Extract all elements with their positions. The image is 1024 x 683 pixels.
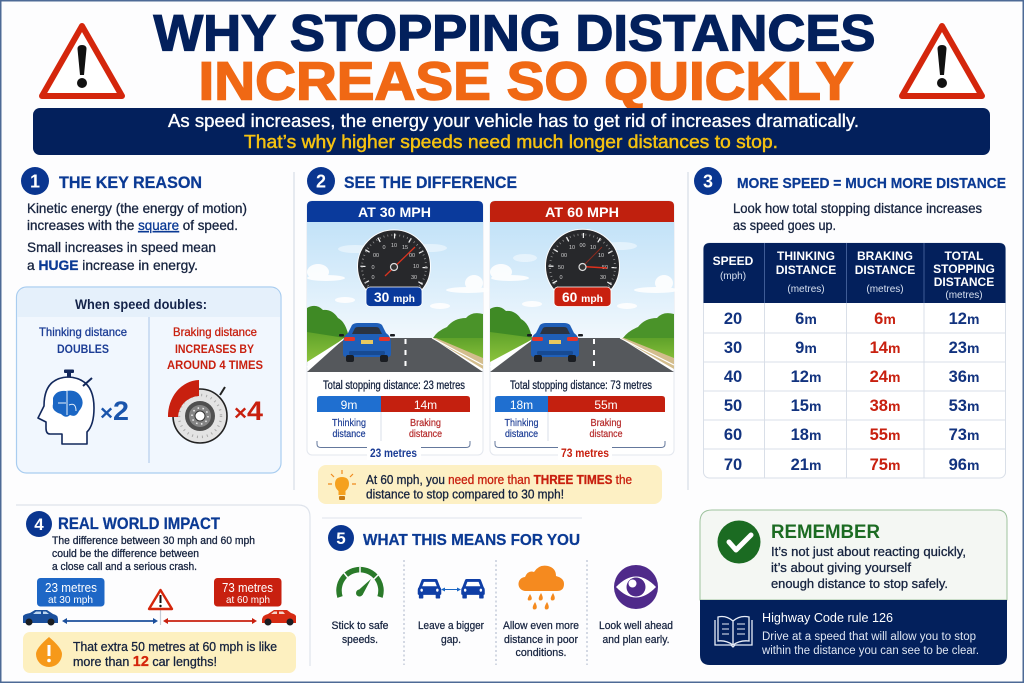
row 70 mph: 96m <box>949 456 979 474</box>
icon: warning triangle left <box>42 26 122 96</box>
distance bar 60 mph: 18m <box>510 398 533 412</box>
table header: SPEED <box>713 254 754 268</box>
icon: alert drop <box>36 637 62 667</box>
text: braking distance increases: AROUND 4 TIMES <box>167 358 263 372</box>
tip: look well ahead: and plan early. <box>602 634 670 646</box>
panel: highway code: Drive at a speed that will allow you to stop <box>762 631 976 643</box>
distance bar 60 mph: 73 metres <box>561 448 609 460</box>
icon: two cars with gap <box>418 579 485 598</box>
row 20 mph <box>724 310 979 328</box>
heading: see the difference: SEE THE DIFFERENCE <box>344 174 517 192</box>
callout: three times the distance <box>318 465 662 504</box>
card: at 30 mph <box>307 201 490 460</box>
icon: light bulb <box>328 470 356 500</box>
speedometer 30 mph: 0 <box>382 245 386 251</box>
distance bar 60 mph: 55m <box>594 398 618 412</box>
speedometer 60 mph: 10 <box>590 245 596 251</box>
panel: the key reason <box>16 167 281 473</box>
panel: real world impact <box>16 505 310 673</box>
heading: real world impact <box>26 511 221 537</box>
callout: three times the distance: distance to stop compared to 30 mph! <box>366 488 564 502</box>
label: 23 metres at 30 mph <box>37 578 104 606</box>
speedometer 60 mph: 30 <box>600 275 606 281</box>
icon: eye <box>614 565 658 609</box>
tip: poor conditions: distance in poor <box>504 634 578 646</box>
heading: remember: REMEMBER <box>771 522 880 543</box>
speedometer 60 mph: 0 <box>559 275 563 281</box>
text: braking distance increases: INCREASES BY <box>175 342 254 356</box>
callout: car lengths: more than 12 car lengths! <box>73 653 217 670</box>
row 50 mph: 38m <box>870 397 900 415</box>
panel: highway code <box>700 600 1007 665</box>
panel: see the difference <box>307 167 678 504</box>
speedometer 30 mph: 00 <box>373 253 379 259</box>
heading: see the difference <box>307 167 517 195</box>
table header: DISTANCE <box>776 263 836 277</box>
icon: warning sign <box>149 590 172 625</box>
label: 73 metres at 60 mph: at 60 mph <box>226 594 270 606</box>
table header: (metres) <box>866 284 904 295</box>
row 70 mph: 21m <box>791 456 821 474</box>
row 40 mph: 24m <box>870 368 900 386</box>
text block: remember: enough distance to stop safely. <box>771 576 948 591</box>
row 70 mph <box>724 456 979 474</box>
subtitle banner: That’s why higher speeds need much longer distances to stop. <box>244 131 778 152</box>
label: 23 metres at 30 mph: 23 metres <box>45 580 97 595</box>
row 20 mph: 12m <box>949 310 979 328</box>
text: thinking distance doubles <box>39 325 127 356</box>
distance bar 60 mph: Thinking <box>504 418 538 429</box>
distance bar 30 mph: 14m <box>414 398 437 412</box>
speedometer 60 mph: 00 <box>561 253 567 259</box>
text block: difference: The difference between 30 mph and 60 mph <box>52 535 255 547</box>
heading: the key reason: 1 <box>30 172 40 192</box>
table header: STOPPING <box>933 262 995 276</box>
row 70 mph: 70 <box>724 456 742 474</box>
speedometer 30 mph: 15 <box>402 245 408 251</box>
speedometer 60 mph <box>546 229 620 300</box>
panel: highway code: Highway Code rule 126 <box>762 610 893 625</box>
tip: poor conditions: Allow even more <box>503 620 579 632</box>
subtitle banner: As speed increases, the energy your vehicle has to get rid of increases dramatically. <box>168 110 859 131</box>
heading: what this means: 5 <box>336 529 346 548</box>
row 50 mph: 15m <box>791 397 821 415</box>
table header: (metres) <box>945 290 983 301</box>
road scene <box>307 222 490 372</box>
card: at 60 mph <box>490 201 678 460</box>
table header: (mph) <box>720 271 746 282</box>
callout: car lengths <box>23 632 296 673</box>
heading: what this means <box>328 525 580 551</box>
icon: head with brain <box>38 370 94 444</box>
text block: remember: it’s about giving yourself <box>771 560 911 575</box>
row 60 mph: 18m <box>791 426 821 444</box>
heading: more speed <box>694 167 1006 195</box>
text block: kinetic energy: increases with the square of speed. <box>27 217 238 233</box>
distance bar 30 mph <box>317 396 470 460</box>
speedometer 60 mph: 10 <box>598 253 604 259</box>
speedometer 60 mph: 00 <box>579 243 586 249</box>
row 30 mph: 14m <box>870 339 900 357</box>
text: times four: ×4 <box>234 396 263 426</box>
speed badge 60 mph <box>554 287 611 306</box>
text: thinking distance doubles: DOUBLES <box>57 342 109 356</box>
panel: what this means for you <box>322 518 673 665</box>
text: braking distance increases: Braking distance <box>173 325 257 339</box>
row 50 mph: 50 <box>724 397 742 415</box>
label: 23 metres at 30 mph: at 30 mph <box>48 594 93 606</box>
text block: look how: as speed goes up. <box>733 218 836 233</box>
heading: the key reason <box>21 167 202 195</box>
table header: TOTAL <box>945 249 983 263</box>
callout: car lengths: That extra 50 metres at 60 mph is like <box>73 639 277 654</box>
tip: look well ahead: Look well ahead <box>599 620 673 632</box>
panel: when speed doubles: When speed doubles: <box>75 296 207 312</box>
icon: red car <box>262 610 296 626</box>
card: at 30 mph: AT 30 MPH <box>358 204 431 220</box>
tip: leave a bigger gap: Leave a bigger <box>418 620 484 632</box>
arrow: red distance <box>163 618 257 624</box>
title: INCREASE SO QUICKLY <box>198 52 854 112</box>
text: times two: ×2 <box>100 396 129 426</box>
panel: more speed much more distance <box>694 167 1006 478</box>
heading: what this means: WHAT THIS MEANS FOR YOU <box>363 532 580 549</box>
row 40 mph: 36m <box>949 368 979 386</box>
distance bar 30 mph: Thinking <box>332 418 366 429</box>
heading: more speed: MORE SPEED = MUCH MORE DISTANCE <box>737 175 1006 192</box>
tip: stick to safe speeds <box>332 567 388 646</box>
speed badge 30 mph: 30 mph <box>374 289 415 305</box>
icon: green gauge <box>339 567 381 597</box>
speedometer 60 mph: 50 <box>602 265 608 271</box>
row 30 mph: 9m <box>795 339 817 357</box>
row 60 mph: 55m <box>870 426 900 444</box>
total stopping distance 23 metres: Total stopping distance: 23 metres <box>323 380 465 392</box>
icon: blue car <box>23 610 58 626</box>
icon: warning triangle right <box>902 26 982 96</box>
text block: remember: It’s not just about reacting quickly, <box>771 544 966 559</box>
table header <box>713 249 995 301</box>
title <box>154 4 876 112</box>
label: 73 metres at 60 mph <box>214 578 282 606</box>
text block: difference <box>52 535 255 573</box>
speedometer 60 mph: 50 <box>558 265 564 271</box>
speedometer 30 mph: 00 <box>409 253 415 259</box>
row 30 mph <box>724 339 979 357</box>
heading: more speed: 3 <box>703 172 713 192</box>
table header: (metres) <box>787 284 825 295</box>
table header: THINKING <box>777 249 835 263</box>
heading: real world impact: REAL WORLD IMPACT <box>58 514 221 533</box>
speedometer 30 mph: 0 <box>371 265 375 271</box>
table header: DISTANCE <box>934 275 994 289</box>
speedometer 30 mph: 10 <box>413 264 419 270</box>
table header: DISTANCE <box>855 263 915 277</box>
text block: kinetic energy: Kinetic energy (the energy of motion) <box>27 200 247 216</box>
table header: BRAKING <box>857 249 913 263</box>
text block: kinetic energy: Small increases in speed mean <box>27 239 216 255</box>
speedometer 30 mph <box>358 230 430 299</box>
row 20 mph: 6m <box>874 310 896 328</box>
icon: open book <box>715 616 752 647</box>
speed badge 30 mph <box>366 287 422 306</box>
distance bar 30 mph: Braking <box>410 418 441 429</box>
row 50 mph: 53m <box>949 397 979 415</box>
row 40 mph: 40 <box>724 368 742 386</box>
row 60 mph <box>724 426 979 444</box>
icon: check mark <box>718 520 760 564</box>
text: braking distance increases <box>167 325 263 372</box>
tip: look well ahead <box>599 565 673 646</box>
text block: difference: could be the difference between <box>52 548 199 560</box>
row 20 mph: 6m <box>795 310 817 328</box>
distance bar 30 mph: 9m <box>341 398 357 412</box>
row 70 mph: 75m <box>870 456 900 474</box>
tip: leave a bigger gap: gap. <box>441 634 461 646</box>
row 60 mph: 73m <box>949 426 979 444</box>
distance bar 60 mph: distance <box>590 429 623 440</box>
text block: kinetic energy: a HUGE increase in energy. <box>27 257 198 273</box>
text block: look how: Look how total stopping distance increases <box>733 201 982 216</box>
column dividers <box>294 172 688 490</box>
tip: stick to safe speeds: speeds. <box>342 634 378 646</box>
text block: look how <box>733 201 982 233</box>
tip: poor conditions: conditions. <box>516 647 566 659</box>
tip: poor conditions <box>503 566 579 659</box>
speed badge 60 mph: 60 mph <box>562 289 603 305</box>
distance bar 30 mph: distance <box>332 429 366 440</box>
row 30 mph: 23m <box>949 339 979 357</box>
title: WHY STOPPING DISTANCES <box>154 4 876 62</box>
speedometer 30 mph: 10 <box>391 243 397 249</box>
callout: three times the distance: At 60 mph, you need more than THREE TIMES the <box>366 473 632 487</box>
icon: rain cloud <box>518 566 564 609</box>
speedometer 30 mph: 30 <box>411 275 417 281</box>
text block: remember <box>771 544 966 591</box>
distance bar 30 mph: 23 metres <box>370 448 417 460</box>
arrow: blue distance <box>62 618 158 624</box>
subtitle banner <box>33 108 990 155</box>
distance bar 60 mph: Braking <box>590 418 622 429</box>
distance bar 60 mph <box>495 396 665 460</box>
row 50 mph <box>724 397 979 415</box>
text block: kinetic energy <box>27 200 247 273</box>
row 40 mph <box>724 368 979 386</box>
panel: when speed doubles <box>16 287 281 473</box>
panel: remember <box>700 510 1007 665</box>
label: 73 metres at 60 mph: 73 metres <box>222 580 273 595</box>
row 30 mph: 30 <box>724 339 742 357</box>
row 60 mph: 60 <box>724 426 742 444</box>
text block: difference: a close call and a serious crash. <box>52 561 197 573</box>
icon: brake disc <box>168 380 227 443</box>
tip: stick to safe speeds: Stick to safe <box>332 620 388 632</box>
tip: leave a bigger gap <box>418 579 485 646</box>
distance bar 30 mph: distance <box>409 429 442 440</box>
speedometer 30 mph: 0 <box>371 275 375 281</box>
table: stopping distances <box>704 243 1006 478</box>
row 40 mph: 12m <box>791 368 821 386</box>
distance bar 60 mph: distance <box>505 429 538 440</box>
card: at 60 mph: AT 60 MPH <box>545 204 619 220</box>
panel: highway code: within the distance you can see to be clear. <box>761 645 979 657</box>
heading: the key reason: THE KEY REASON <box>59 174 202 192</box>
speedometer 60 mph: 10 <box>569 245 575 251</box>
text: thinking distance doubles: Thinking distance <box>39 325 127 339</box>
row 20 mph: 20 <box>724 310 742 328</box>
heading: see the difference: 2 <box>316 172 326 192</box>
heading: real world impact: 4 <box>34 515 44 534</box>
total stopping distance 73 metres: Total stopping distance: 73 metres <box>510 380 652 392</box>
road scene <box>490 222 678 372</box>
